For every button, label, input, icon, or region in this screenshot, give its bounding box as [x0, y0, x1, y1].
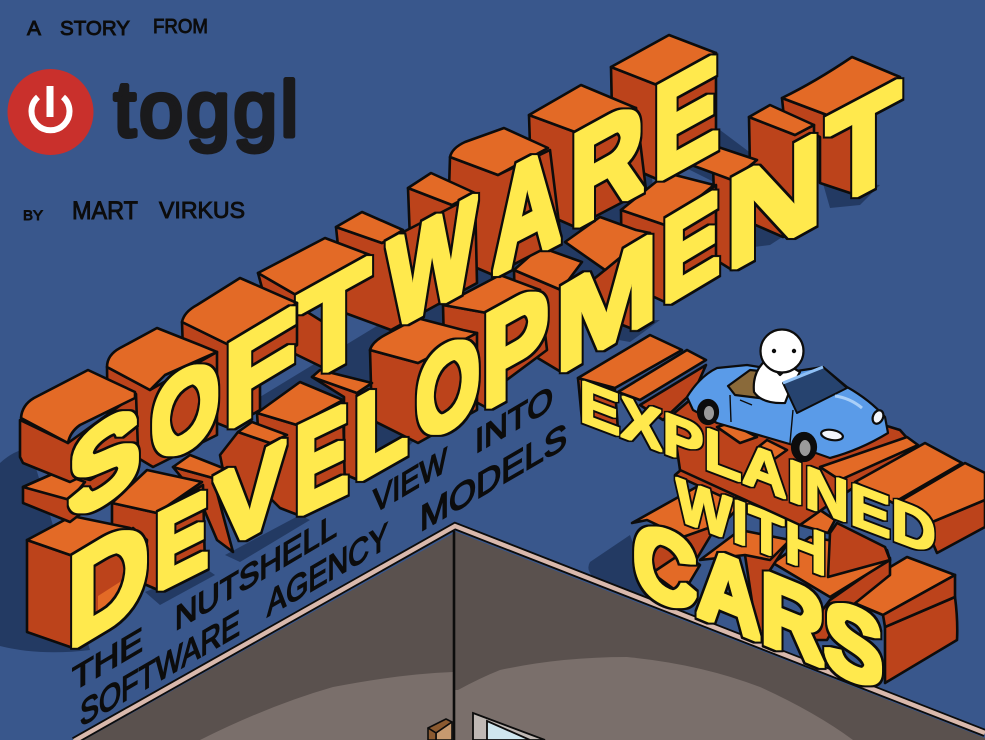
subtitle: the nutshell view into software agency models: AGENCY: [267, 515, 388, 625]
WITH blocks: [675, 445, 890, 577]
letter A: A: [493, 115, 561, 305]
byline: [23, 197, 245, 225]
car body: [687, 365, 888, 458]
subtitle: the nutshell view into software agency models: MODELS: [420, 415, 567, 540]
corner line: [453, 531, 455, 740]
cockpit and seat: [728, 370, 775, 400]
header text: a story from: A: [27, 18, 42, 40]
letter F: F: [223, 280, 298, 456]
A block: [700, 530, 790, 640]
title word: SOFTWARE: [20, 27, 720, 548]
rear wheel: [698, 400, 718, 424]
subtitle: the nutshell view into software agency models: THE: [72, 620, 143, 699]
letter T: [258, 231, 371, 414]
roof edge highlight: [74, 526, 985, 740]
driver body: [754, 360, 800, 403]
C block: [632, 485, 745, 595]
R block: [773, 537, 890, 640]
byline: MART: [72, 197, 138, 225]
door line: [730, 395, 793, 443]
toggl logo: [8, 65, 298, 155]
letter T: T: [826, 53, 901, 238]
subtitle: the nutshell view into software agency models: VIEW: [373, 440, 447, 521]
letter R: R: [570, 72, 644, 257]
window: [473, 713, 545, 740]
header text: a story from: [27, 16, 208, 40]
title word: DEVELOPMENT: [27, 53, 901, 677]
logo circle: [8, 69, 94, 155]
word: CARS with extrusion: [632, 485, 957, 713]
letter N: N: [725, 104, 823, 299]
letter E: E: [662, 166, 720, 331]
CARS lettering: CARS: [633, 499, 883, 713]
letter W: [336, 169, 477, 358]
letter S: S: [68, 377, 141, 548]
letter R: [529, 72, 646, 257]
letter O: O: [416, 305, 480, 470]
letter E: [112, 468, 208, 614]
letter O: [107, 328, 219, 491]
EXPLAINED lettering: EXPLAINED: [579, 368, 936, 568]
WITH lettering: WITH: [676, 466, 827, 590]
letter E: [621, 166, 720, 331]
letter L: [312, 347, 408, 506]
header text: a story from: STORY: [60, 18, 130, 40]
subtitle: the nutshell view into software agency models: INTO: [475, 378, 553, 461]
letter T: [782, 53, 901, 238]
power icon: [31, 86, 69, 130]
letter P: [443, 255, 549, 439]
letter L: L: [354, 347, 408, 506]
floor light patch: [200, 657, 853, 740]
letter V: [173, 418, 287, 577]
header text: a story from: FROM: [153, 16, 208, 38]
letter O: [370, 305, 480, 470]
letter V: V: [215, 418, 285, 577]
front wheel: [792, 433, 816, 461]
letter D: D: [67, 486, 149, 677]
letter E: E: [295, 377, 348, 543]
letter E: E: [653, 27, 720, 211]
letter T: T: [297, 231, 371, 414]
word: EXPLAINED with extrusion: [578, 335, 985, 568]
EXPLAINED blocks: [578, 335, 985, 553]
roof edge strip: [74, 526, 985, 740]
letter P: P: [482, 255, 549, 439]
letter A: [447, 115, 561, 305]
windshield: [783, 367, 847, 413]
driver eyes: [772, 349, 796, 353]
letter M: M: [555, 207, 658, 400]
letter S: [20, 370, 141, 548]
headlight front: [820, 428, 844, 442]
word: WITH with extrusion: [675, 445, 890, 590]
letter F: [182, 278, 298, 456]
box on the floor: [428, 719, 452, 740]
byline: VIRKUS: [159, 197, 245, 223]
driver head: [760, 330, 804, 372]
wall: [84, 532, 985, 740]
hood highlight: [835, 396, 862, 408]
letter O: O: [151, 331, 219, 491]
cast shadows of title letters: [0, 130, 880, 652]
letter W: W: [388, 169, 476, 358]
letter E: [611, 27, 720, 211]
letter E: E: [155, 468, 208, 614]
letter E: [257, 377, 348, 543]
subtitle: the nutshell view into software agency models: [72, 378, 567, 735]
subtitle: the nutshell view into software agency models: SOFTWARE: [80, 603, 240, 735]
byline: BY: [23, 207, 44, 223]
building: wall and roof edge: [74, 526, 985, 740]
subtitle: the nutshell view into software agency models: NUTSHELL: [175, 505, 337, 638]
windshield frame: [783, 367, 823, 383]
headlight side: [871, 409, 885, 425]
logo wordmark: toggl: [114, 65, 298, 153]
S block: [840, 557, 957, 683]
letter D: [27, 486, 149, 677]
blue convertible car with driver: [687, 330, 888, 461]
